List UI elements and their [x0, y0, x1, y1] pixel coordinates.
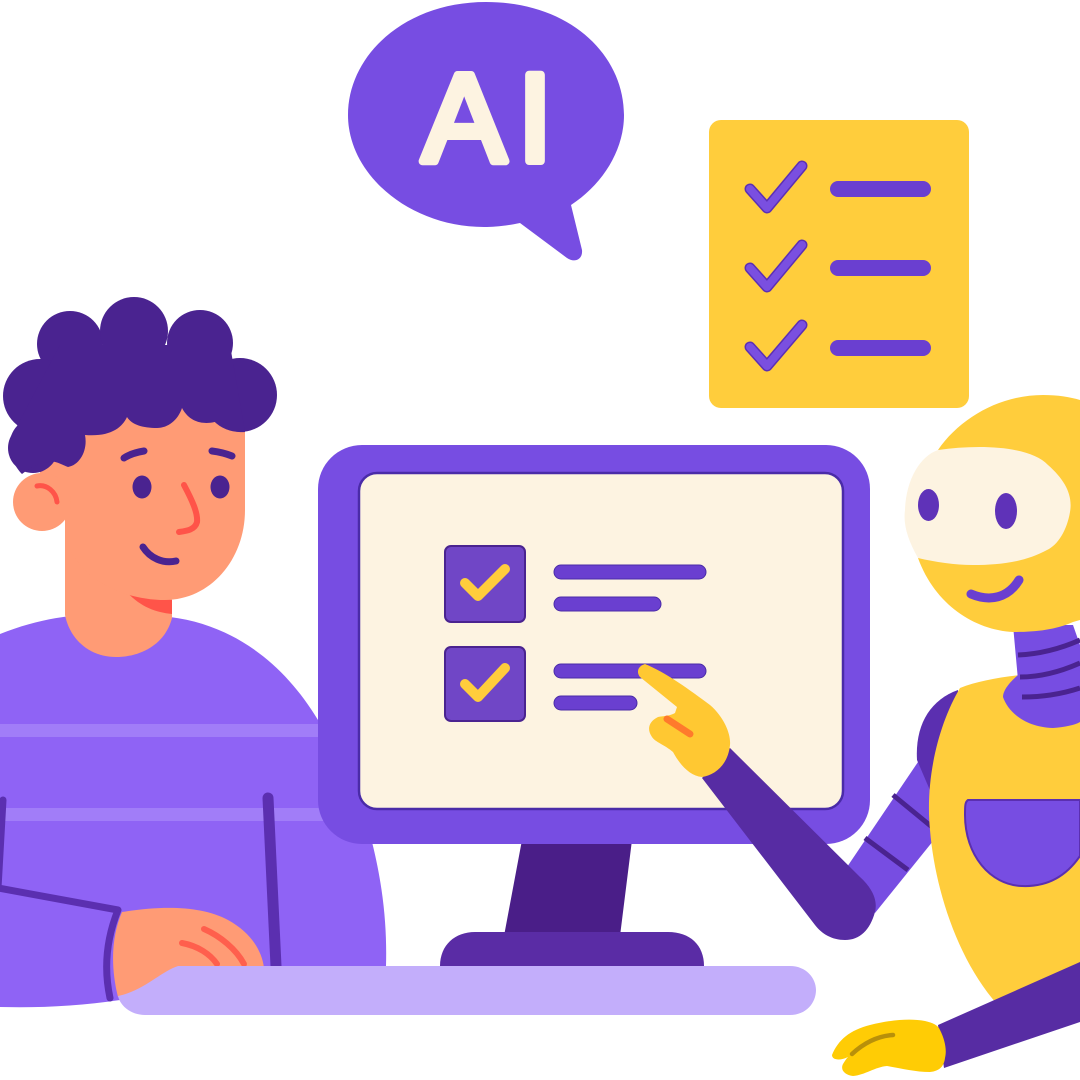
- checklist card: [709, 120, 969, 408]
- monitor: stand: [504, 840, 632, 936]
- monitor: frame: [318, 445, 870, 844]
- robot: chest pocket: [965, 800, 1080, 886]
- person: hair: [3, 297, 277, 474]
- person: torso: [0, 614, 386, 1007]
- person: head: [40, 400, 245, 600]
- person: ear: [13, 473, 71, 531]
- keyboard: [118, 966, 816, 1015]
- person: hand: [113, 908, 264, 997]
- person: neck: [65, 520, 172, 657]
- person: [0, 297, 386, 1007]
- monitor: screen: [359, 473, 843, 809]
- robot: neck: [1003, 625, 1080, 728]
- robot: lower hand: [832, 1020, 946, 1076]
- robot: visor: [905, 447, 1071, 565]
- person: arm outlines: [268, 798, 276, 966]
- robot: pointing arm: [702, 748, 876, 940]
- robot: rear shoulder: [917, 690, 960, 795]
- speech bubble: AI: [348, 2, 624, 260]
- robot: [638, 395, 1080, 1076]
- robot: body: [929, 672, 1080, 1005]
- monitor: [318, 445, 870, 966]
- person: face details: [124, 451, 232, 562]
- robot: pointing hand: [638, 664, 730, 777]
- speech bubble: AI: I: [518, 49, 552, 188]
- speech bubble: AI: A: [422, 49, 506, 188]
- monitor: checkbox rows: [445, 546, 706, 721]
- robot: lower arm: [938, 962, 1080, 1068]
- robot: head: [918, 395, 1080, 632]
- robot: rear arm: [847, 762, 950, 913]
- robot: smile: [971, 580, 1019, 598]
